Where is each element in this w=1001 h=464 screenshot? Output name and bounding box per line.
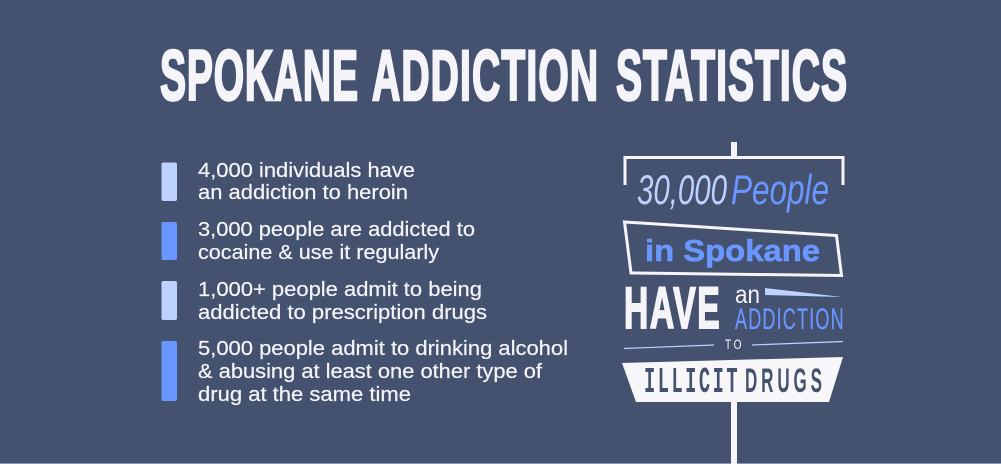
title: ADDICTION <box>372 37 598 116</box>
title: SPOKANE <box>160 37 358 116</box>
sign: 30,000 people have an addiction <box>622 142 844 464</box>
stat item: cocaine <box>162 219 475 264</box>
title <box>160 37 847 116</box>
divider lines <box>624 342 843 348</box>
stat item: alcohol and other drugs: & abusing at least one other type of <box>198 361 542 383</box>
text: in Spokane: in Spokane <box>645 233 820 268</box>
banner: illicit drugs: ILLICIT <box>644 362 740 403</box>
text: HAVE: HAVE <box>624 277 720 341</box>
slanted frame <box>624 222 842 276</box>
script text: 30,000 People: People <box>731 166 829 213</box>
sign post top <box>731 142 737 157</box>
text: ADDICTION: ADDICTION <box>735 304 844 336</box>
text: TO: TO <box>725 337 742 352</box>
stat item: heroin <box>162 160 415 204</box>
text: an: an <box>735 281 760 309</box>
wedge accent <box>765 288 842 297</box>
stat item: heroin: an addiction to heroin <box>198 182 408 204</box>
panel: statistics list <box>162 160 568 406</box>
stat item: heroin: 4,000 individuals have <box>198 160 415 182</box>
script text: 30,000 People: 30,000 <box>637 166 727 213</box>
stat item: prescription drugs <box>162 279 487 324</box>
stat item: alcohol and other drugs: drug at the same time <box>198 384 411 406</box>
bracket frame <box>625 158 843 185</box>
stat item: cocaine: 3,000 people are addicted to <box>198 219 475 241</box>
stat item: alcohol and other drugs <box>162 338 568 406</box>
stat item: alcohol and other drugs: 5,000 people admit to drinking alcohol <box>198 338 568 360</box>
stat item: cocaine: cocaine & use it regularly <box>198 242 439 264</box>
stat item: prescription drugs: addicted to prescription drugs <box>198 302 487 324</box>
banner: illicit drugs: DRUGS <box>745 362 822 400</box>
banner: illicit drugs <box>622 357 843 403</box>
title: STATISTICS <box>616 37 847 116</box>
sign post bottom <box>731 402 737 464</box>
stat item: prescription drugs: 1,000+ people admit to being <box>198 279 482 301</box>
